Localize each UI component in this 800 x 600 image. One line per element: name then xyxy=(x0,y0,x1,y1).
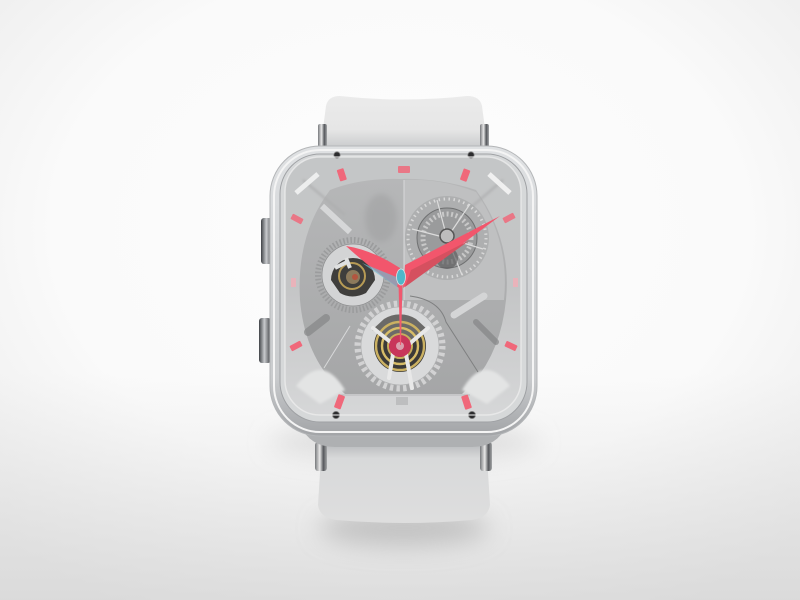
strap: top xyxy=(320,96,488,152)
watch hands xyxy=(346,216,500,345)
centre pin xyxy=(396,269,406,285)
strap: bottom xyxy=(318,440,490,523)
gear: upper right wheel xyxy=(405,196,489,280)
crown: lower button xyxy=(259,318,271,363)
crown: upper button xyxy=(261,218,273,264)
lug: bottom right xyxy=(480,442,492,471)
glass highlight xyxy=(285,157,521,415)
watch case xyxy=(270,146,537,447)
hour markers xyxy=(289,166,518,410)
lug: top left xyxy=(318,124,327,148)
hour hand xyxy=(346,246,400,288)
interior: bridges xyxy=(322,206,350,232)
flange: blurred corner shading xyxy=(296,180,510,404)
dial: glass and skeleton interior xyxy=(285,157,521,415)
second hand xyxy=(398,282,402,345)
gear: lower tourbillon wheel xyxy=(358,304,442,388)
minute hand xyxy=(403,216,500,288)
lug: top right xyxy=(480,124,489,148)
lug: bottom left xyxy=(315,442,327,471)
case screws xyxy=(332,152,476,419)
interior: movement plate xyxy=(300,179,507,394)
gear: left balance wheel xyxy=(318,240,388,310)
drop shadow xyxy=(269,424,539,546)
flange: corner reliefs xyxy=(296,174,318,193)
